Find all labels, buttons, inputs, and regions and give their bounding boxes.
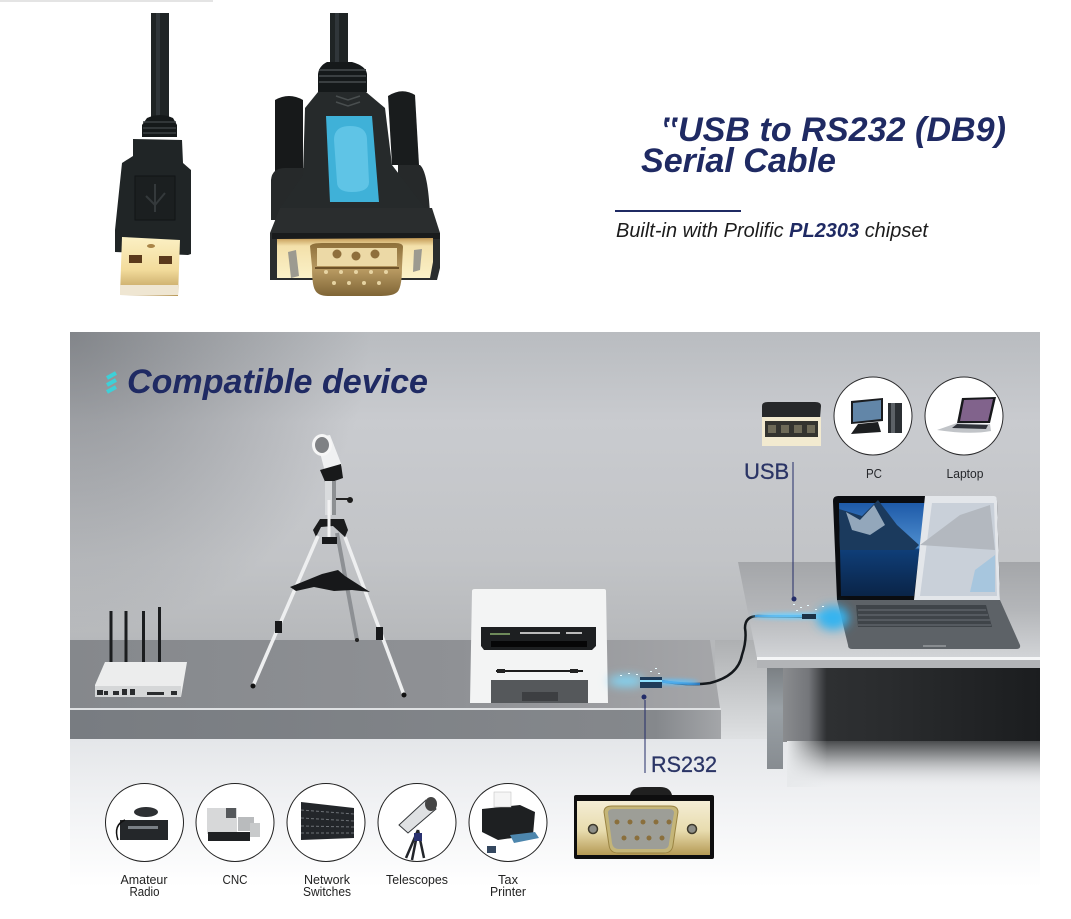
gap between shelf and desk [715, 640, 775, 740]
device: telescopes [378, 784, 456, 887]
device: tax printer: Tax [498, 872, 518, 887]
floor fade [70, 739, 1040, 887]
RS232 callout: RS232 [651, 752, 717, 777]
right desk [738, 562, 1040, 787]
top edge rule [0, 0, 213, 2]
title: USB to RS232 (DB9) [678, 111, 1006, 149]
device: telescopes: Telescopes [386, 872, 448, 887]
title underline [615, 210, 741, 212]
device: network switches: Network [304, 872, 350, 887]
icon: PC [834, 377, 912, 455]
title [641, 111, 1006, 180]
laptop [833, 496, 1020, 649]
device: tax printer: Printer [490, 884, 527, 899]
DB9 connector photo [270, 13, 440, 296]
device: CNC: CNC [222, 872, 248, 887]
device: amateur radio: Radio [130, 884, 160, 899]
low shelf [70, 640, 721, 739]
device: CNC [196, 784, 274, 887]
device: network switches: Switches [303, 884, 351, 899]
icon: laptop [925, 377, 1003, 455]
USB callout [744, 459, 796, 602]
heading: compatible device: Compatible device [127, 363, 428, 401]
device: amateur radio: Amateur [120, 872, 168, 887]
device: network switches [287, 784, 365, 899]
label: PC: PC [866, 466, 882, 481]
icon: USB port [762, 402, 821, 446]
cable with glow [608, 604, 849, 688]
printer [470, 589, 608, 703]
title: Serial Cable [641, 142, 836, 180]
icon: DB9 port [574, 787, 714, 859]
icon: teal chevrons [107, 373, 116, 392]
USB-A connector photo [115, 13, 191, 296]
RS232 callout [642, 694, 717, 777]
title: ‟ [660, 111, 678, 149]
device: tax printer [469, 784, 547, 899]
room wall [70, 332, 1040, 742]
device: amateur radio [106, 784, 184, 899]
subtitle: Built-in with Prolific PL2303 chipset [616, 220, 929, 242]
telescope on tripod [250, 434, 406, 698]
panel: compatible device scene [70, 332, 1040, 899]
USB callout: USB [744, 459, 789, 484]
router [95, 607, 187, 697]
label: laptop: Laptop [946, 466, 984, 481]
